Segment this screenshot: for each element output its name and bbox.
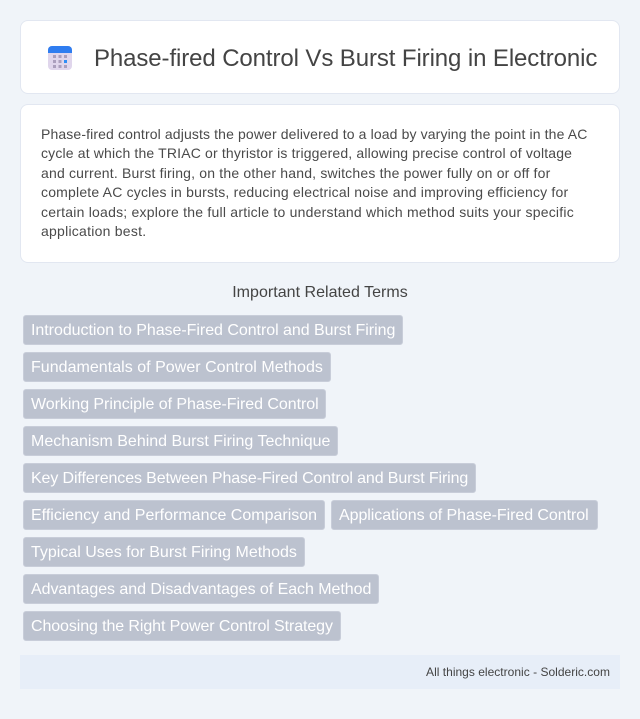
title card	[20, 20, 620, 94]
footer	[20, 655, 620, 689]
description text: cycle at which the TRIAC or thyristor is triggered, allowing precise control of voltage	[41, 145, 572, 161]
heading: important related terms: Important Related Terms	[232, 284, 408, 301]
tag: Mechanism Behind Burst Firing Technique	[31, 433, 330, 450]
tag	[23, 500, 325, 530]
tag	[331, 500, 598, 530]
tag	[23, 352, 331, 382]
tag: Applications of Phase-Fired Control	[339, 507, 589, 524]
tag	[23, 315, 403, 345]
tag: Key Differences Between Phase-Fired Control and Burst Firing	[31, 470, 468, 487]
footer credit: All things electronic - Solderic.com	[426, 665, 610, 679]
tag: Advantages and Disadvantages of Each Method	[31, 581, 371, 598]
tag	[23, 611, 341, 641]
tag	[23, 426, 338, 456]
description text: and current. Burst firing, on the other hand, switches the power fully on or off for	[41, 165, 550, 181]
tag	[23, 574, 379, 604]
tag: Introduction to Phase-Fired Control and Burst Firing	[31, 322, 395, 339]
tag: Fundamentals of Power Control Methods	[31, 359, 323, 376]
title: Phase-fired Control Vs Burst Firing in Electronic	[94, 45, 597, 72]
tag: Working Principle of Phase-Fired Control	[31, 396, 319, 413]
tag list	[23, 315, 598, 641]
description text	[41, 126, 587, 239]
description text: Phase-fired control adjusts the power delivered to a load by varying the point in the AC	[41, 126, 587, 142]
tag	[23, 389, 326, 419]
panel: description	[20, 104, 620, 263]
tag: Choosing the Right Power Control Strategy	[31, 618, 333, 635]
tag: Typical Uses for Burst Firing Methods	[31, 544, 297, 561]
description text: complete AC cycles in bursts, reducing electrical noise and improving efficiency for	[41, 184, 568, 200]
description text: application best.	[41, 223, 146, 239]
tag: Efficiency and Performance Comparison	[31, 507, 317, 524]
tag	[23, 463, 476, 493]
tag	[23, 537, 305, 567]
icon: calendar	[48, 46, 72, 70]
description text: certain loads; explore the full article to understand which method suits your specific	[41, 204, 574, 220]
